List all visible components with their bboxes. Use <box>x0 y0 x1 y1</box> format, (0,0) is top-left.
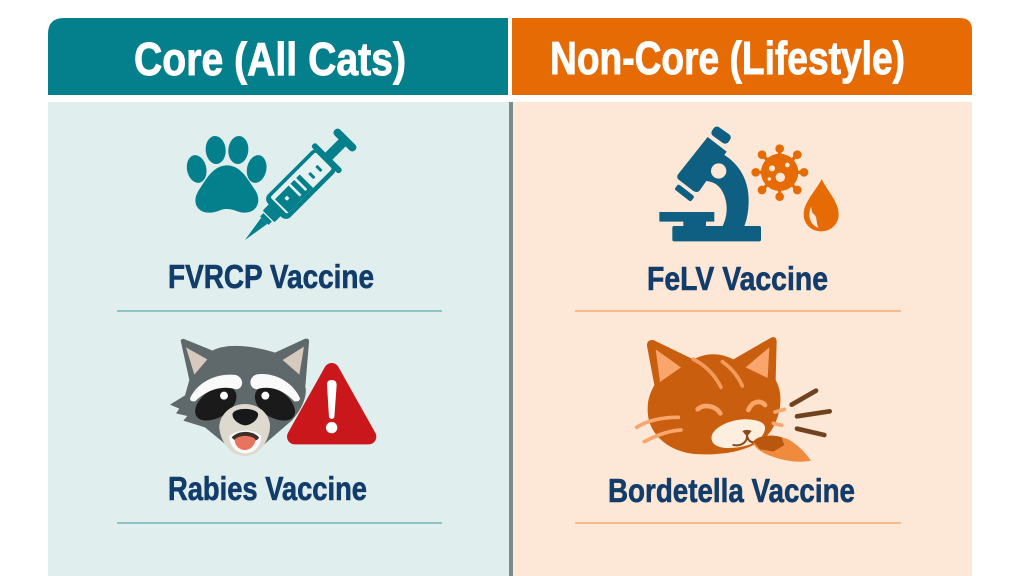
icon: raccoon and warning triangle <box>170 339 369 456</box>
label: Bordetella vaccine: Bordetella Vaccine <box>608 472 855 509</box>
label: FVRCP vaccine: FVRCP Vaccine <box>168 258 374 295</box>
heading: non-core <box>512 18 972 95</box>
blood drop <box>804 179 839 231</box>
heading: core <box>48 18 508 95</box>
virus <box>751 144 808 201</box>
raccoon head <box>170 339 309 456</box>
label: Rabies vaccine: Rabies Vaccine <box>168 470 367 507</box>
heading: non-core: Non-Core (Lifestyle) <box>550 32 905 84</box>
icon: sneezing cat <box>637 337 830 462</box>
warning triangle <box>295 371 369 437</box>
sneeze lines <box>792 391 830 435</box>
rule under Rabies <box>117 522 442 524</box>
icon: microscope, virus and drop <box>659 125 839 241</box>
rule under FeLV <box>575 310 901 312</box>
paw / tail at nose <box>753 436 811 462</box>
label: FeLV vaccine: FeLV Vaccine <box>647 260 828 297</box>
heading: core: Core (All Cats) <box>134 33 406 85</box>
icon: paw and syringe <box>184 123 362 254</box>
rule under Bordetella <box>575 522 901 524</box>
cat head <box>637 337 784 454</box>
centre divider <box>509 102 513 576</box>
rule under FVRCP <box>117 310 442 312</box>
panel: non-core column background <box>513 102 972 576</box>
panel: core column background <box>48 102 509 576</box>
microscope <box>659 125 761 241</box>
